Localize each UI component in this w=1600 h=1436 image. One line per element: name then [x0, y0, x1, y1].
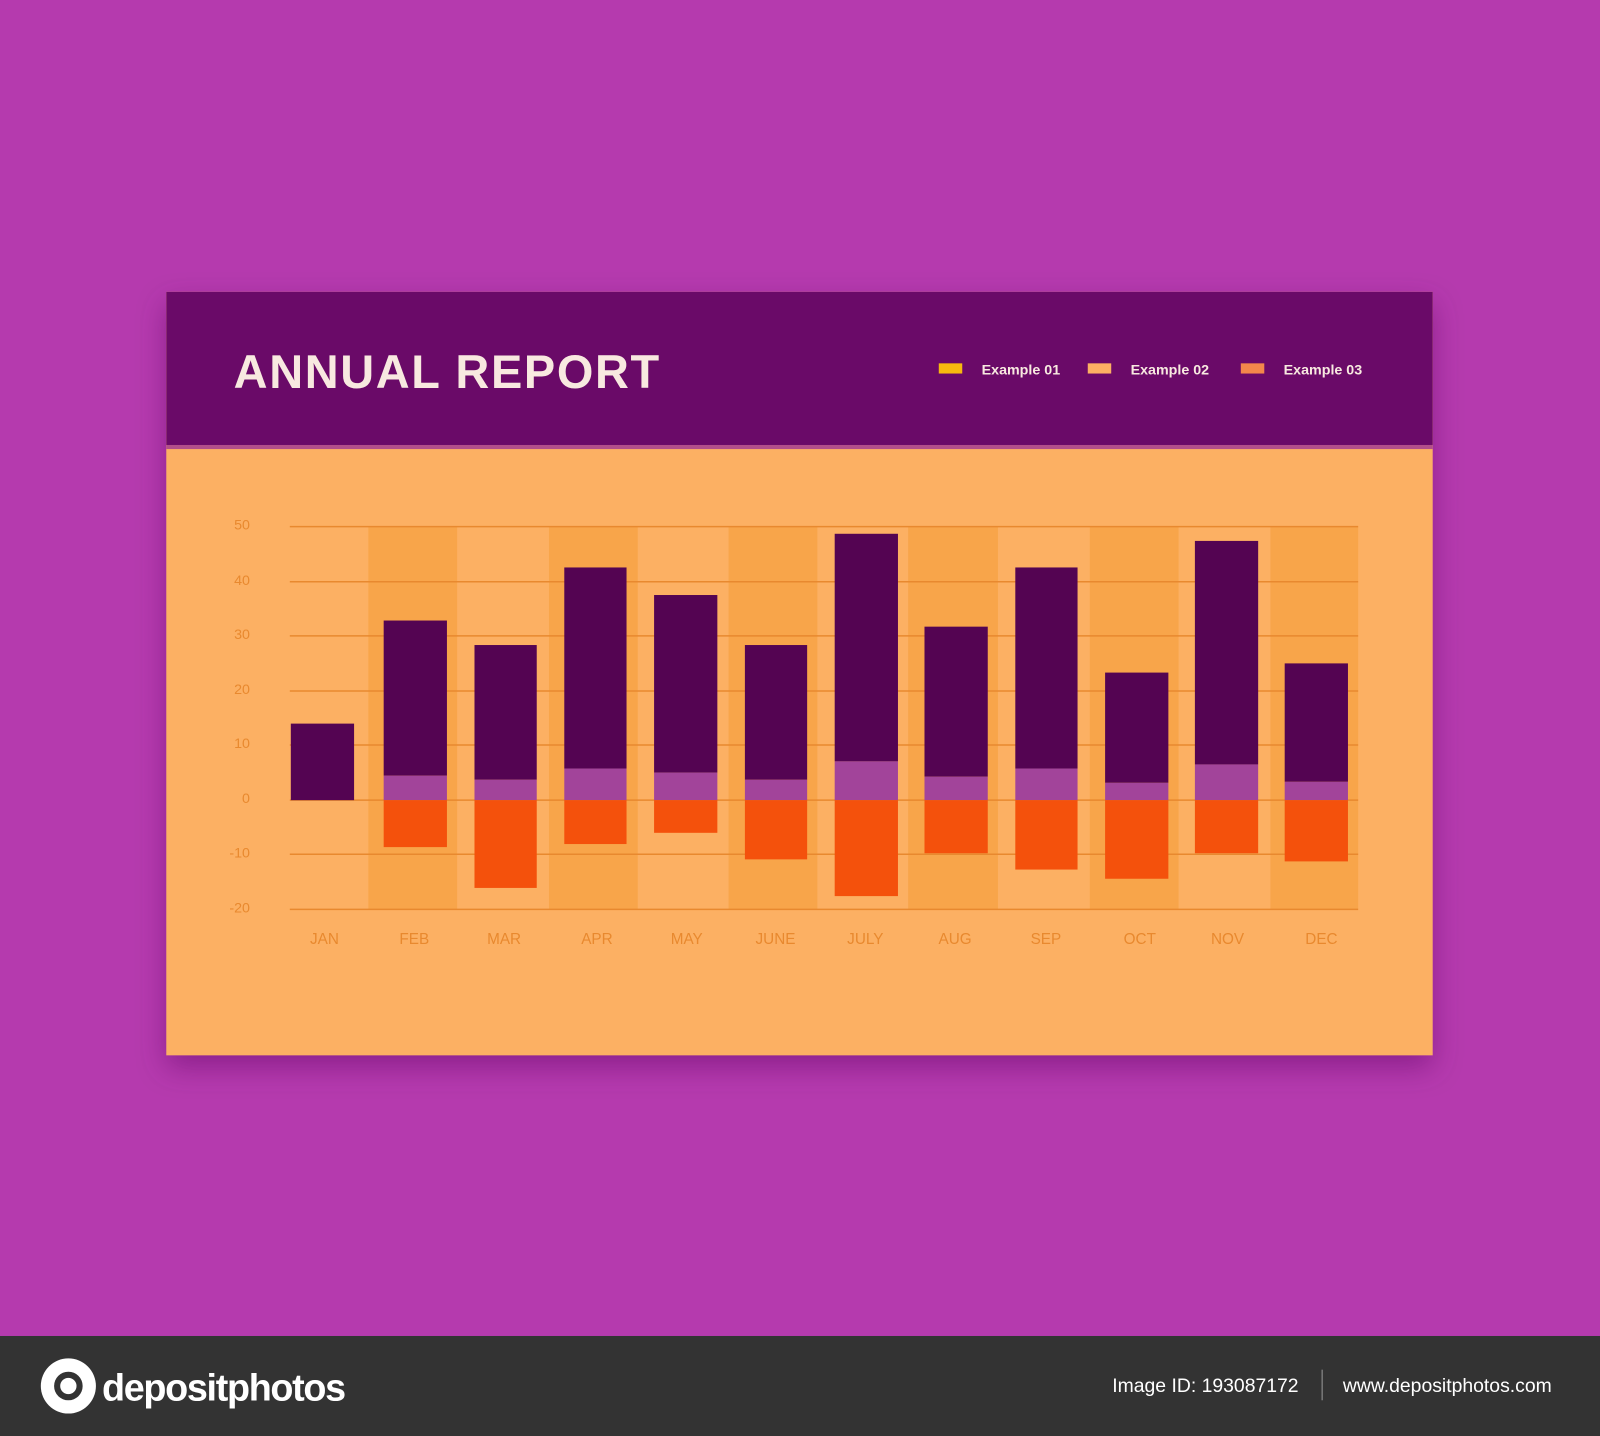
- y axis labels: -20: [229, 900, 250, 916]
- x axis labels: FEB: [399, 931, 429, 948]
- header: [166, 292, 1433, 449]
- x axis labels: JUNE: [756, 931, 795, 948]
- y axis labels: [229, 518, 250, 916]
- legend: Example 01: [982, 363, 1060, 379]
- legend: Example 03: [1284, 363, 1362, 379]
- footer info: [1112, 1370, 1552, 1400]
- x axis labels: DEC: [1305, 931, 1338, 948]
- footer info: Image ID: 193087172: [1112, 1375, 1299, 1397]
- title: ANNUAL REPORT: [234, 346, 661, 398]
- x axis labels: OCT: [1124, 931, 1156, 948]
- y axis labels: 50: [234, 518, 250, 534]
- x axis labels: APR: [581, 931, 613, 948]
- y axis labels: 0: [242, 791, 250, 807]
- legend: [939, 363, 1362, 379]
- footer: [0, 1336, 1600, 1436]
- card: [166, 292, 1433, 1055]
- x axis labels: AUG: [939, 931, 972, 948]
- x axis labels: JAN: [310, 931, 339, 948]
- footer logo: [41, 1358, 345, 1414]
- y axis labels: 40: [234, 573, 250, 589]
- x axis labels: SEP: [1031, 931, 1061, 948]
- footer info: www.depositphotos.com: [1342, 1375, 1552, 1397]
- chart: [229, 518, 1358, 948]
- y axis labels: 30: [234, 627, 250, 643]
- y axis labels: 10: [234, 736, 250, 752]
- bars: [291, 534, 1348, 896]
- x axis labels: MAR: [487, 931, 521, 948]
- x axis labels: [310, 931, 1338, 948]
- footer logo: depositphotos: [102, 1366, 345, 1408]
- x axis labels: MAY: [671, 931, 703, 948]
- x axis labels: NOV: [1211, 931, 1245, 948]
- legend: Example 02: [1131, 363, 1209, 379]
- y axis labels: -10: [229, 845, 250, 861]
- x axis labels: JULY: [847, 931, 883, 948]
- y axis labels: 20: [234, 682, 250, 698]
